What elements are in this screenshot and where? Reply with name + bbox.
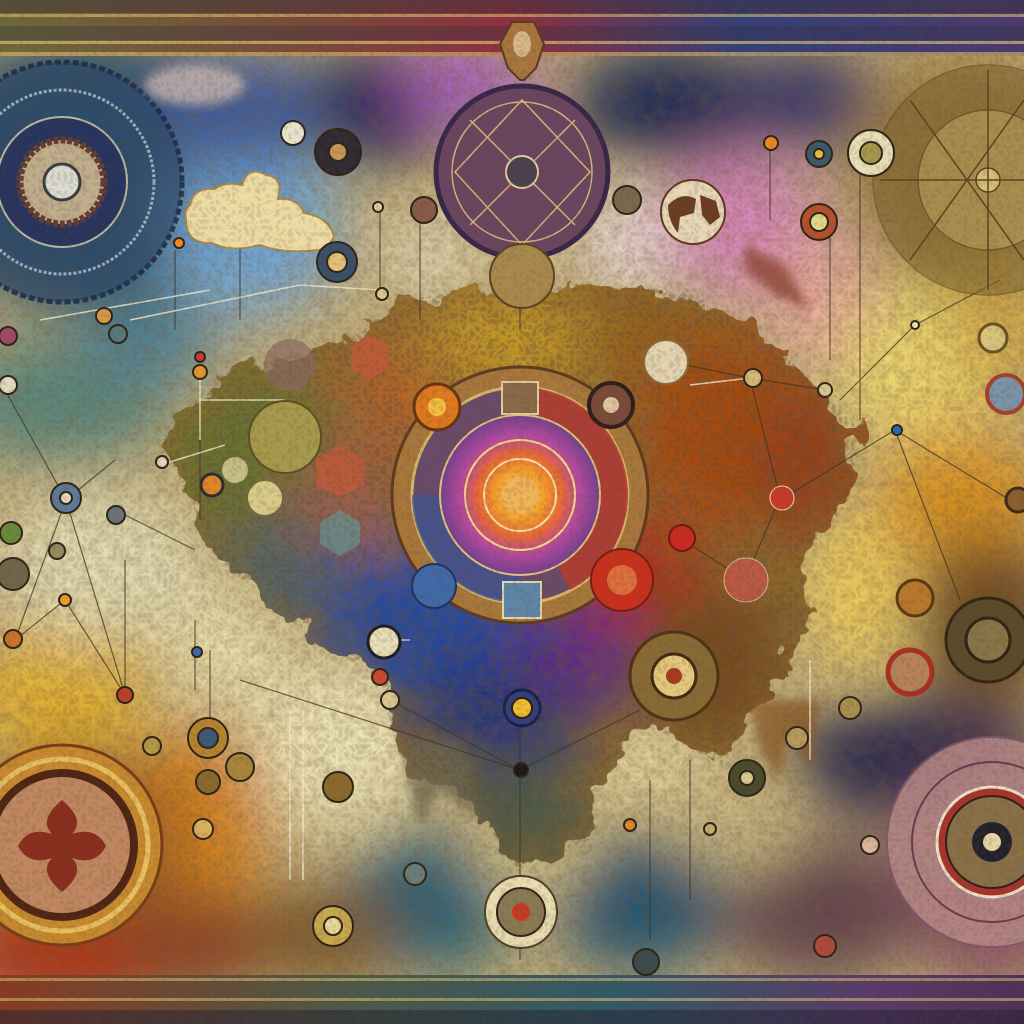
small nodes — [0, 121, 919, 975]
mandala: top centre — [436, 86, 608, 258]
face medallion — [500, 22, 544, 80]
mandala: right side — [888, 324, 1024, 694]
light connector lines — [40, 285, 810, 880]
bottom-left mandala — [0, 745, 162, 945]
medallions on map — [201, 244, 794, 726]
cloud — [145, 65, 334, 251]
bottom-right mandala — [887, 737, 1024, 947]
top ornamental border — [0, 0, 1024, 56]
map landmass — [161, 276, 869, 864]
globe icon — [661, 180, 725, 244]
bottom ornamental border — [0, 975, 1024, 1024]
map fine texture — [160, 286, 860, 871]
central sun mandala — [392, 367, 648, 623]
mandala: upper right — [873, 65, 1024, 295]
bottom-centre medallion — [485, 876, 557, 948]
dangling map drips — [400, 245, 820, 830]
mandala: top left — [0, 62, 182, 302]
